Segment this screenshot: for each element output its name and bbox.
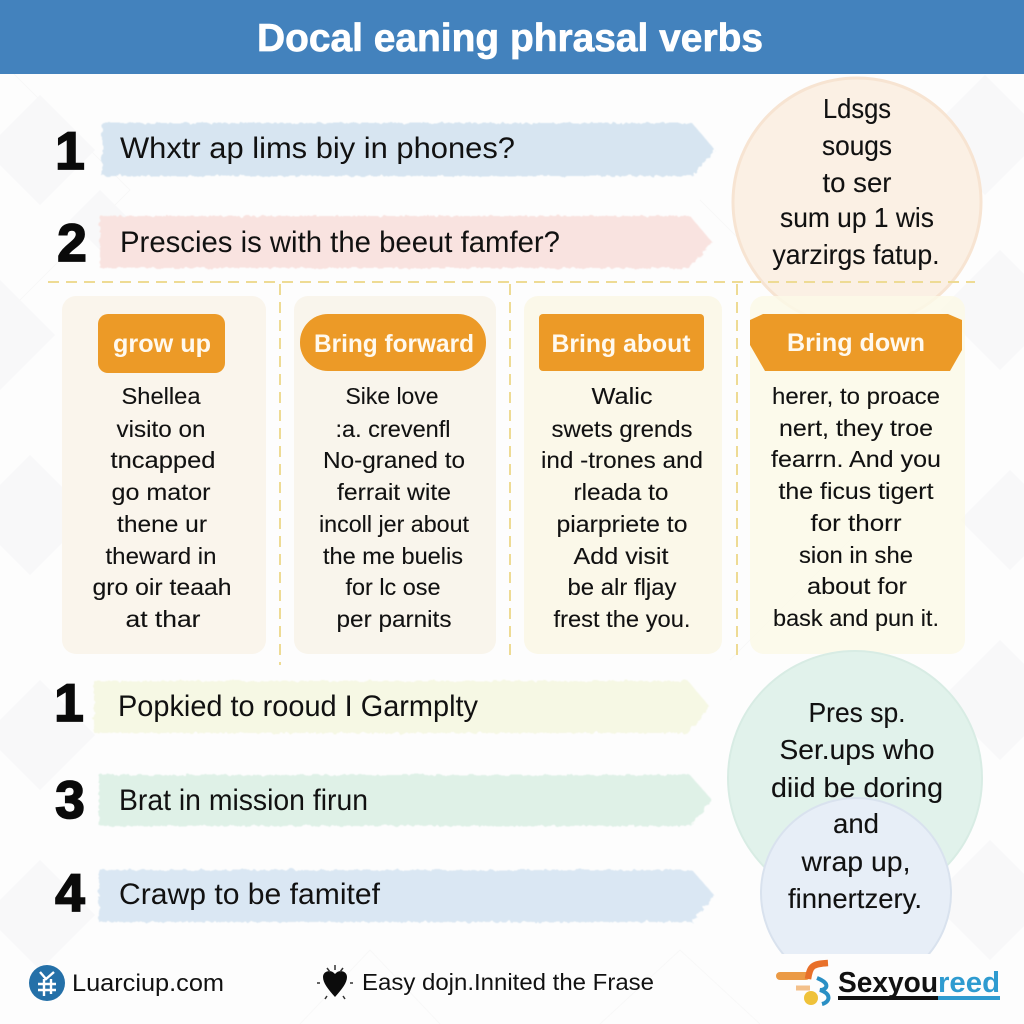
card: bring forward: ferrait wite <box>337 479 451 505</box>
circle callout text: wrap up, <box>800 846 910 877</box>
card: bring about <box>524 296 722 654</box>
card: bring about: frest the you. <box>554 606 690 632</box>
card: bring forward: for lc ose <box>346 574 440 600</box>
circle callout text: Pres sp. <box>808 697 906 728</box>
circle callout text: and <box>833 808 879 839</box>
card: grow up: at thar <box>126 606 201 632</box>
circle callout text: Ser.ups who <box>780 734 934 765</box>
question row 1: Whxtr ap lims biy in phones? <box>120 132 515 165</box>
card: bring about: swets grends <box>552 416 692 442</box>
card: grow up: thene ur <box>117 511 207 537</box>
question row 4 <box>55 771 712 830</box>
dashed frame lines <box>48 282 975 665</box>
peach circle callout: yarzirgs fatup. <box>772 239 940 270</box>
question row 3: 1 <box>54 674 84 733</box>
peach circle callout: to ser <box>822 167 892 198</box>
card: bring down: the ficus tigert <box>778 478 934 504</box>
circle callout text: finnertzery. <box>788 883 922 914</box>
card: bring down <box>750 296 965 654</box>
question row 2: 2 <box>57 214 87 273</box>
card: bring about: Bring about <box>552 330 691 358</box>
card: bring forward: per parnits <box>336 606 452 632</box>
question row 5 <box>55 864 714 923</box>
footer brand logo: Sexyou <box>838 967 938 999</box>
green circle callout <box>728 651 982 905</box>
card: grow up: go mator <box>112 479 211 505</box>
card: bring forward: No-graned to <box>323 447 465 473</box>
question row 3 <box>54 674 710 733</box>
circle callout text: diid be doring <box>771 772 943 803</box>
card: bring down: nert, they troe <box>779 415 933 441</box>
question row 2: Prescies is with the beeut famfer? <box>120 226 560 259</box>
card: bring forward: Bring forward <box>314 330 474 358</box>
footer website: Luarciup.com <box>72 970 224 997</box>
card: grow up: tncapped <box>110 447 216 473</box>
card: bring about: piarpriete to <box>556 511 688 537</box>
card: bring forward: Sike love <box>346 383 438 409</box>
peach circle callout <box>733 78 981 326</box>
card: bring down: fearrn. And you <box>771 446 941 472</box>
card: bring about: be alr fljay <box>568 574 677 600</box>
question row 5: 4 <box>55 864 85 923</box>
card: bring down: Bring down <box>787 329 925 357</box>
footer background strip <box>770 954 945 1014</box>
card: bring forward: :a. crevenfl <box>336 416 450 442</box>
blue circle callout <box>761 798 951 988</box>
question row 2 <box>57 214 712 273</box>
footer tagline with heart icon <box>317 965 654 999</box>
question row 5: Crawp to be famitef <box>119 878 381 911</box>
circle callout text <box>771 697 943 914</box>
card: grow up: theward in <box>106 543 216 569</box>
card: grow up <box>62 296 266 654</box>
card: bring forward: the me buelis <box>323 543 463 569</box>
card: bring forward <box>294 296 496 654</box>
footer website <box>29 965 224 1001</box>
question row 1: 1 <box>55 122 85 181</box>
question row 3: Popkied to rooud I Garmplty <box>118 690 478 723</box>
card: bring down: sion in she <box>799 542 913 568</box>
footer tagline with heart icon: Easy dojn.Innited the Frase <box>362 969 654 995</box>
question row 1 <box>55 122 715 181</box>
card: grow up: Shellea <box>122 383 201 409</box>
card: grow up: visito on <box>116 416 206 442</box>
card: bring down: herer, to proace <box>772 383 940 409</box>
card: bring about: ind -trones and <box>541 447 703 473</box>
title: Docal eaning phrasal verbs <box>257 17 763 60</box>
card: bring about: Walic <box>592 383 652 409</box>
card: grow up: grow up <box>113 330 211 358</box>
question row 4: Brat in mission firun <box>119 784 368 817</box>
peach circle callout: Ldsgs <box>823 93 891 124</box>
peach circle callout: sougs <box>822 130 892 161</box>
header banner <box>0 0 1024 74</box>
card: bring forward: incoll jer about <box>319 511 470 537</box>
card: grow up: gro oir teaah <box>92 574 232 600</box>
card: bring down: about for <box>807 573 907 599</box>
question row 4: 3 <box>55 771 85 830</box>
peach circle callout: sum up 1 wis <box>780 202 934 233</box>
card: bring down: for thorr <box>810 510 902 536</box>
card: bring down: bask and pun it. <box>773 605 939 631</box>
footer brand logo: reed <box>938 967 1000 999</box>
card: bring about: rleada to <box>574 479 668 505</box>
footer brand logo <box>780 963 1000 1005</box>
card: bring about: Add visit <box>574 543 669 569</box>
